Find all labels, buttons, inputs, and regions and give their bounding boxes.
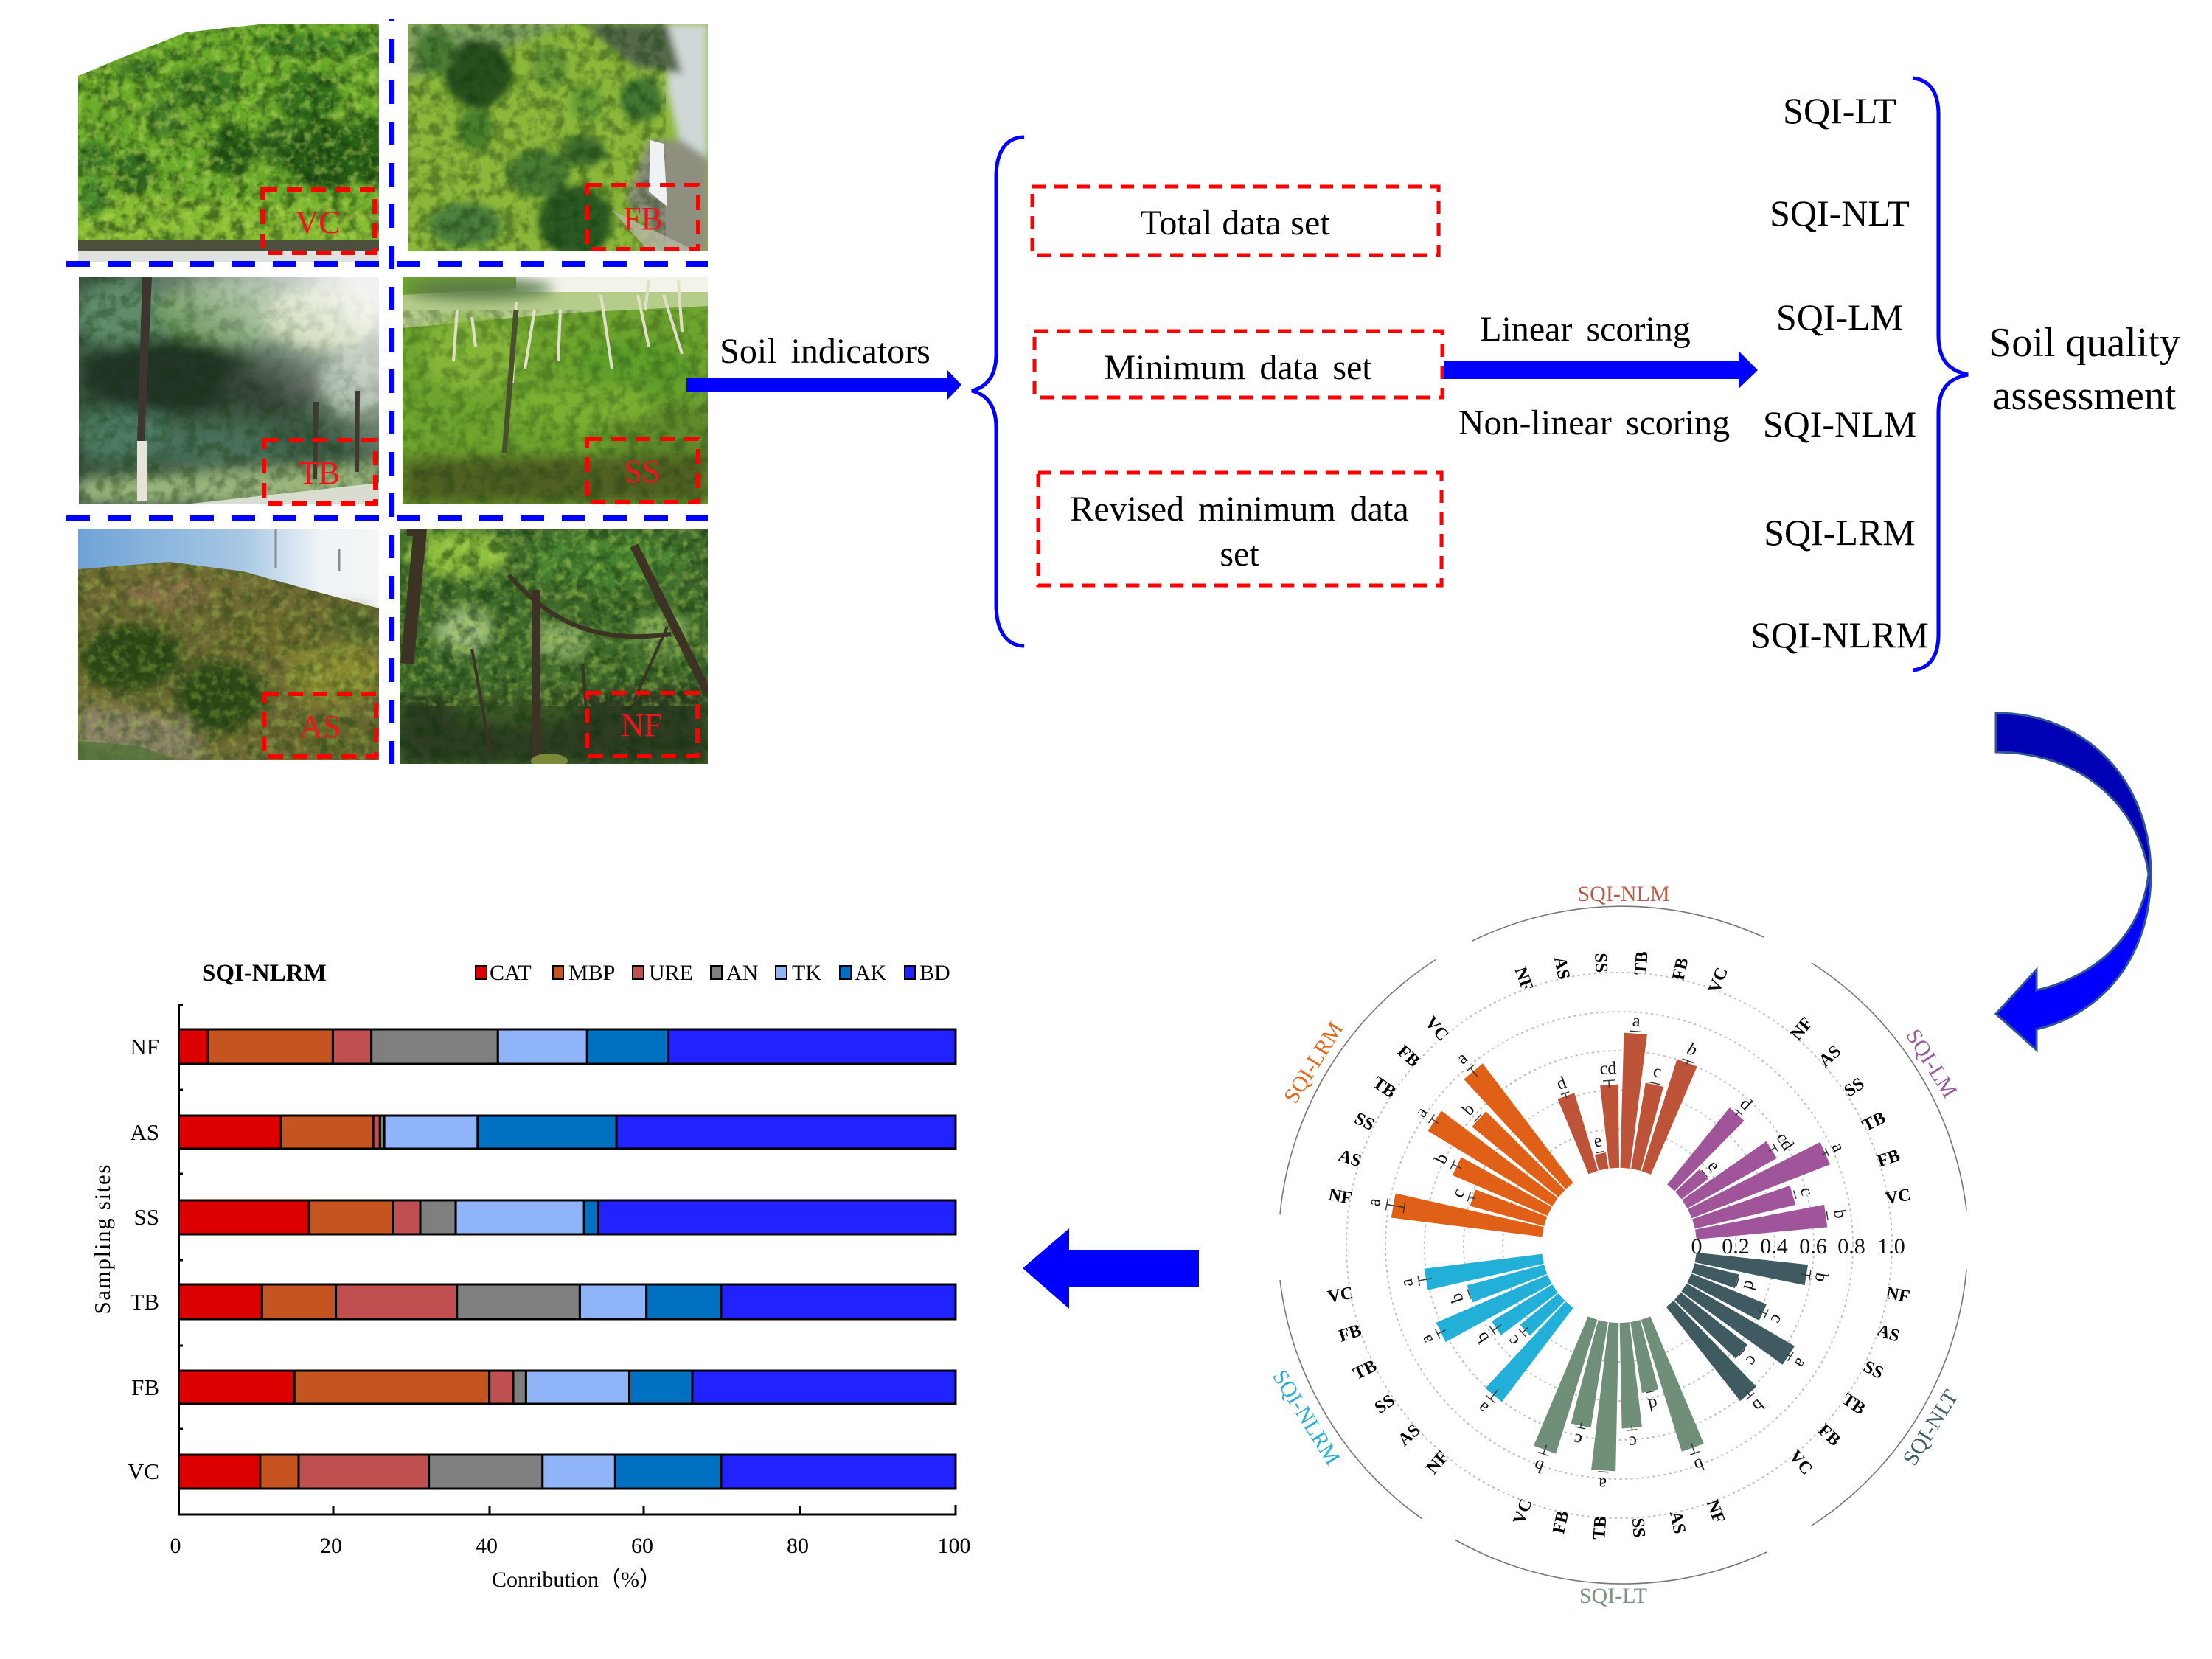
SQI list: SQI-NLT [1770,192,1910,234]
bars: SQI-NLM: d [1554,1073,1569,1094]
label box: AS [264,694,376,757]
group title: SQI-LRM: SQI-LRM [1279,1018,1348,1107]
box: Revised minimum data set [1038,473,1441,585]
brace: SQI [1913,78,1968,670]
x tick labels: 0 [170,1534,181,1558]
bars: SQI-NLM: a [1632,1012,1641,1031]
arrow: data sets to SQI [1444,351,1758,389]
site labels: VC [1421,1013,1453,1045]
site labels [1326,950,1913,1540]
photo: VC site [77,22,392,262]
chart title: SQI-NLRM [202,960,327,987]
bars: SQI-LT: b [1531,1455,1546,1476]
y category labels: SS [134,1204,159,1230]
legend: AN [726,961,758,985]
photo: FB site [408,24,708,257]
label box: SS [587,439,698,502]
x tick labels: 60 [631,1534,653,1558]
x tick labels: 40 [476,1534,498,1558]
box: Minimum data set [1034,331,1442,397]
label box: TB [264,440,375,504]
site labels: NF [1885,1284,1911,1307]
axes [178,1005,956,1514]
site labels: VC [1509,1496,1537,1527]
bars: SQI-NLT: b [1748,1395,1767,1415]
bars: SQI-NLRM: b [1472,1328,1493,1346]
SQI list [1750,90,1929,655]
site labels: NF [1787,1014,1817,1044]
bars: SQI-LT: d [1646,1394,1659,1414]
site labels: FB [1669,956,1692,982]
site labels: AS [1550,955,1573,981]
bars: SQI-LRM: c [1448,1186,1469,1200]
bars: SQI-LRM: b [1458,1100,1478,1119]
label: Non-linear scoring: Non-linear scoring [1458,403,1730,442]
y axis title: Sampling sites [89,1165,115,1314]
site labels: VC [1785,1447,1816,1478]
legend: AK [855,961,887,985]
label box: SS: SS [625,453,660,490]
bars: SQI-LM: b [1829,1208,1850,1220]
bars: SQI-NLM [1550,1011,1705,1177]
site labels: TB [1631,950,1652,975]
site labels: FB [1549,1509,1573,1536]
site labels: SS [1590,953,1611,973]
y category labels: VC [128,1458,159,1484]
site labels: TB [1838,1390,1868,1419]
site labels: TB [1369,1073,1399,1102]
outer arcs [1280,906,1966,1584]
photo: AS site [78,529,383,760]
label box: VC: VC [295,204,341,240]
bars: SQI-LM [1663,1091,1851,1245]
site labels: TB [1590,1515,1610,1540]
x axis title: Conribution（%） [492,1568,661,1592]
SQI list: SQI-NLRM [1750,614,1929,655]
group title: SQI-NLRM: SQI-NLRM [1267,1366,1345,1469]
bars: SQI-NLRM: a [1474,1397,1492,1417]
photo: TB site [74,277,387,504]
site labels: AS [1874,1321,1902,1346]
box: Total data set: Total data set [1140,204,1330,243]
site labels: NF [1511,964,1537,993]
photo: NF site [400,529,708,768]
photo: SS site [403,277,730,504]
bars: SQI-LRM [1363,1043,1579,1244]
site labels: SS [1628,1517,1649,1538]
radial scale: 0.2 [1722,1234,1750,1259]
legend: BD [919,961,950,985]
SQI list: SQI-LT [1783,90,1896,131]
bar: NF [178,1029,956,1064]
bars: SQI-LRM: a [1364,1197,1385,1208]
radial scale: 0.8 [1837,1234,1865,1259]
label: Soil quality assessment [1989,320,2180,419]
bar: SS [178,1200,956,1234]
site labels: AS [1394,1421,1424,1450]
box: Revised minimum data set: set [1220,535,1259,574]
box: Total data set [1032,187,1439,255]
bars: SQI-NLM: b [1684,1039,1700,1060]
bars: SQI-LM: d [1736,1094,1756,1114]
y category labels: TB [130,1289,159,1315]
bar: TB [178,1284,956,1319]
SQI list: SQI-NLM [1763,403,1916,445]
group title: SQI-NLT: SQI-NLT [1898,1385,1964,1470]
bars: SQI-LT: c [1572,1429,1584,1450]
site labels: SS [1352,1109,1377,1135]
label box: NF [587,693,698,756]
brace: data sets [972,137,1024,646]
label: Soil indicators: Soil indicators [720,332,931,371]
bars: SQI-LM: c [1796,1185,1817,1198]
label: Soil quality assessment: Soil quality [1989,320,2180,366]
site labels: TB [1350,1357,1380,1384]
bars: SQI-LM: e [1703,1157,1723,1175]
site labels: FB [1815,1421,1844,1450]
y category labels: AS [130,1119,159,1145]
site labels: AS [1815,1042,1845,1071]
x tick labels: 100 [938,1534,970,1558]
bars: SQI-NLRM [1396,1248,1578,1422]
site labels: FB [1337,1321,1364,1346]
bars: SQI-LM: cd [1772,1130,1798,1154]
bars: SQI-LT: a [1598,1474,1607,1494]
bars: SQI-NLT: c [1742,1352,1761,1370]
bars: SQI-NLRM: a [1397,1277,1417,1288]
bars: SQI-NLRM: a [1416,1331,1437,1347]
radial scale: 0.4 [1760,1234,1788,1259]
group title: SQI-NLM: SQI-NLM [1578,882,1669,906]
site labels: AS [1666,1509,1689,1536]
bars: SQI-NLT: a [1790,1354,1811,1371]
radial scale: 0.6 [1799,1234,1827,1259]
site labels: TB [1859,1108,1889,1135]
radial scale: 0 [1691,1234,1702,1259]
radial scale: 1.0 [1877,1234,1905,1259]
bars: SQI-NLT: d [1739,1279,1760,1293]
SQI list: SQI-LM [1776,296,1903,338]
label: Linear scoring: Linear scoring [1480,310,1691,349]
site labels: AS [1336,1146,1363,1171]
stacked bar chart [89,960,970,1592]
y category labels: FB [131,1374,159,1400]
label box: NF: NF [621,707,662,743]
bars: SQI-LRM: a [1411,1103,1432,1121]
bars: SQI-NLM: e [1592,1131,1604,1152]
legend: MBP [568,961,615,985]
radial scale [1691,1234,1905,1259]
SQI list: SQI-LRM [1764,512,1916,553]
arrow: radial chart to bar chart [1023,1228,1199,1309]
group title: SQI-LM: SQI-LM [1901,1025,1962,1102]
site labels: NF [1703,1498,1728,1526]
label box: FB: FB [623,201,663,237]
bars: SQI-LT: b [1691,1454,1706,1475]
legend: TK [792,961,821,985]
bar: AS [178,1116,956,1149]
x tick labels: 20 [320,1534,342,1558]
bars: SQI-NLT: c [1767,1311,1787,1326]
bars: SQI-NLT [1662,1247,1832,1419]
site labels: NF [1327,1186,1354,1208]
curved arrow [1996,713,2151,1050]
site labels: VC [1884,1185,1913,1208]
bar: FB [178,1371,956,1404]
bars: SQI-LT [1525,1314,1713,1494]
y category labels: NF [130,1034,159,1060]
site labels: SS [1841,1074,1868,1101]
box: Revised minimum data set: Revised minimum data [1070,490,1409,529]
label box: FB [587,185,698,249]
site labels: SS [1371,1391,1399,1418]
bar: VC [178,1455,956,1489]
site labels: NF [1423,1447,1453,1478]
bars: SQI-NLRM: c [1503,1331,1523,1350]
label box: TB: TB [299,455,340,491]
bars: SQI-LT: c [1628,1432,1638,1452]
bars: SQI-LM: a [1828,1140,1848,1155]
bars: SQI-LRM: a [1453,1048,1472,1068]
site labels: VC [1705,965,1732,995]
legend: URE [649,961,693,985]
label: Soil quality assessment: assessment [1993,373,2177,419]
radial bar chart [1326,950,1913,1540]
x tick labels: 80 [787,1534,809,1558]
site labels: SS [1860,1357,1886,1383]
bars: SQI-NLM: cd [1599,1059,1617,1079]
x tick labels [170,1534,970,1558]
site labels: FB [1875,1146,1902,1171]
box: Minimum data set: Minimum data set [1104,348,1372,387]
group title: SQI-LT: SQI-LT [1579,1584,1647,1608]
bars: SQI-NLRM: b [1447,1291,1468,1305]
arrow: photos to data sets [686,370,961,400]
label box: VC [262,189,375,253]
site labels: FB [1394,1042,1423,1071]
y category labels [128,1034,159,1484]
legend: CAT [490,961,532,985]
site labels: VC [1326,1284,1354,1307]
label box: AS: AS [299,709,341,745]
bars: SQI-NLT: b [1811,1271,1831,1283]
bars: SQI-LRM: b [1431,1150,1452,1167]
legend [476,961,950,985]
bars: SQI-NLM: c [1652,1062,1663,1082]
